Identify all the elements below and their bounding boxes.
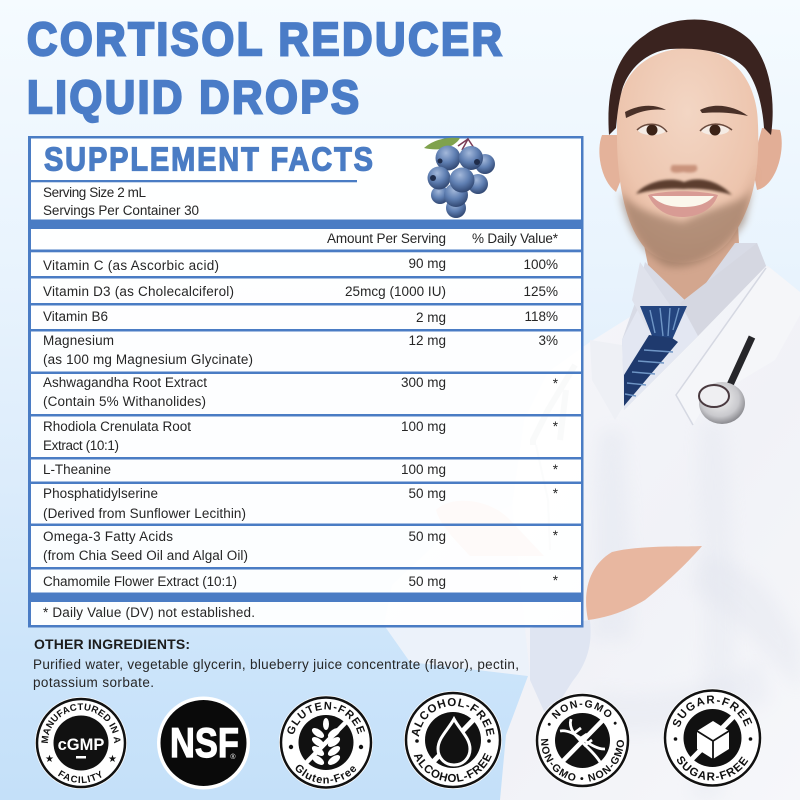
- badge: alcohol-free: [404, 691, 502, 789]
- row: chamomile: 50 mg: [408, 574, 446, 589]
- tie: [624, 306, 687, 406]
- row: ashwagandha: Ashwagandha Root Extract: [43, 375, 207, 390]
- doctor coat: [384, 262, 800, 800]
- badge: non-gmo: • NON-GMO •: [548, 700, 617, 726]
- row: vitamin b6: Vitamin B6: [43, 309, 108, 324]
- row: vitamin b6: 2 mg: [416, 310, 446, 325]
- row: rhodiola: Rhodiola Crenulata Root: [43, 419, 191, 434]
- footnote: * Daily Value (DV) not established.: [43, 605, 255, 620]
- title: [27, 14, 502, 123]
- row: phosphatidylserine: [43, 486, 559, 521]
- row: magnesium: Magnesium: [43, 333, 114, 348]
- serving info: Serving Size 2 mL: [43, 185, 146, 200]
- icon: sugar cube: [697, 721, 729, 759]
- badge: NSF: ®: [230, 753, 236, 761]
- row: vitamin d3: [43, 284, 558, 299]
- badge: sugar-free: [663, 688, 762, 788]
- serving info: [43, 185, 199, 218]
- row: magnesium: (as 100 mg Magnesium Glycinate): [43, 352, 253, 367]
- row: rhodiola: *: [553, 419, 559, 434]
- row: chamomile: Chamomile Flower Extract (10:1): [43, 574, 237, 589]
- badge: sugar-free: SUGAR-FREE: [672, 696, 752, 727]
- row: vitamin c: Vitamin C (as Ascorbic acid): [43, 258, 219, 273]
- supplement facts heading: SUPPLEMENT FACTS: [44, 141, 373, 178]
- row: vitamin d3: 25mcg (1000 IU): [345, 284, 446, 299]
- title: CORTISOL REDUCER: [27, 14, 502, 65]
- badge: gluten-free: [279, 696, 373, 790]
- row: phosphatidylserine: (Derived from Sunflower Lecithin): [43, 506, 246, 521]
- row: phosphatidylserine: *: [553, 486, 559, 501]
- row: vitamin c: 100%: [523, 257, 558, 272]
- hand behind table: [436, 501, 544, 556]
- row: rhodiola: [43, 419, 559, 453]
- serving info: Servings Per Container 30: [43, 203, 199, 218]
- forearm: [586, 546, 702, 620]
- row: vitamin c: 90 mg: [408, 256, 446, 271]
- column headers: [327, 231, 559, 246]
- badge: alcohol-free: ALCOHOL-FREE: [412, 698, 494, 737]
- row: l-theanine: *: [553, 462, 559, 477]
- other ingredients: potassium sorbate.: [33, 675, 154, 690]
- row: vitamin d3: 125%: [523, 284, 558, 299]
- row: vitamin b6: [43, 309, 558, 325]
- doctor head: [599, 19, 782, 267]
- table panel: [28, 136, 584, 628]
- row: vitamin c: [43, 256, 558, 273]
- badge: NSF: NSF: [170, 720, 239, 767]
- row: ashwagandha: 300 mg: [401, 375, 446, 390]
- icon: wheat: [310, 718, 342, 767]
- row: omega-3: [43, 528, 559, 563]
- badge: non-gmo: [535, 693, 630, 788]
- row: l-theanine: 100 mg: [401, 462, 446, 477]
- row: chamomile: [43, 573, 559, 589]
- doctor neck and shirt: [622, 225, 766, 410]
- coat lapels: [590, 268, 800, 425]
- row: magnesium: 3%: [538, 333, 558, 348]
- row: omega-3: Omega-3 Fatty Acids: [43, 529, 173, 544]
- row: phosphatidylserine: 50 mg: [408, 486, 446, 501]
- badge: cGMP: [35, 697, 127, 789]
- row: omega-3: *: [553, 528, 559, 543]
- row: ashwagandha: [43, 375, 559, 409]
- badge: NSF: [157, 696, 250, 790]
- badge: non-gmo: NON-GMO • NON-GMO: [540, 738, 624, 782]
- icon: dna: [560, 719, 605, 762]
- badge: alcohol-free: ALCOHOL-FREE: [414, 752, 492, 782]
- doctor photo illustration: [384, 19, 800, 800]
- stethoscope: [533, 337, 752, 550]
- badge: gluten-free: Gluten-Free: [296, 764, 356, 784]
- row: omega-3: (from Chia Seed Oil and Algal Oil): [43, 548, 248, 563]
- row: l-theanine: L-Theanine: [43, 462, 111, 477]
- blueberry cluster: [424, 138, 495, 218]
- row: l-theanine: [43, 462, 559, 477]
- row: rhodiola: Extract (10:1): [43, 438, 119, 453]
- other ingredients: OTHER INGREDIENTS:: [34, 636, 190, 652]
- badge: cGMP: ★: [108, 754, 117, 765]
- row: ashwagandha: (Contain 5% Withanolides): [43, 394, 206, 409]
- badge: cGMP: FACILITY: [58, 770, 102, 784]
- badge: gluten-free: GLUTEN-FREE: [287, 702, 366, 734]
- row: magnesium: 12 mg: [408, 333, 446, 348]
- row: vitamin d3: Vitamin D3 (as Cholecalciferol): [43, 284, 234, 299]
- other ingredients: Purified water, vegetable glycerin, blueberry juice concentrate (flavor), pectin,: [33, 657, 519, 672]
- badge: sugar-free: SUGAR-FREE: [676, 756, 748, 780]
- row: chamomile: *: [553, 573, 559, 588]
- row: phosphatidylserine: Phosphatidylserine: [43, 486, 158, 501]
- title: LIQUID DROPS: [27, 72, 359, 123]
- badge: cGMP: cGMP: [58, 736, 104, 754]
- row: ashwagandha: *: [553, 376, 559, 391]
- badge: cGMP: ★: [45, 754, 54, 765]
- column headers: Amount Per Serving: [327, 231, 446, 246]
- column headers: % Daily Value*: [472, 231, 559, 246]
- row: vitamin b6: 118%: [524, 309, 558, 324]
- badge: cGMP: MANUFACTURED IN A: [41, 703, 120, 744]
- table rules: [28, 136, 584, 628]
- row: magnesium: [43, 333, 558, 367]
- other ingredients: [33, 636, 519, 690]
- row: rhodiola: 100 mg: [401, 419, 446, 434]
- icon: drop: [438, 719, 470, 765]
- row: omega-3: 50 mg: [408, 529, 446, 544]
